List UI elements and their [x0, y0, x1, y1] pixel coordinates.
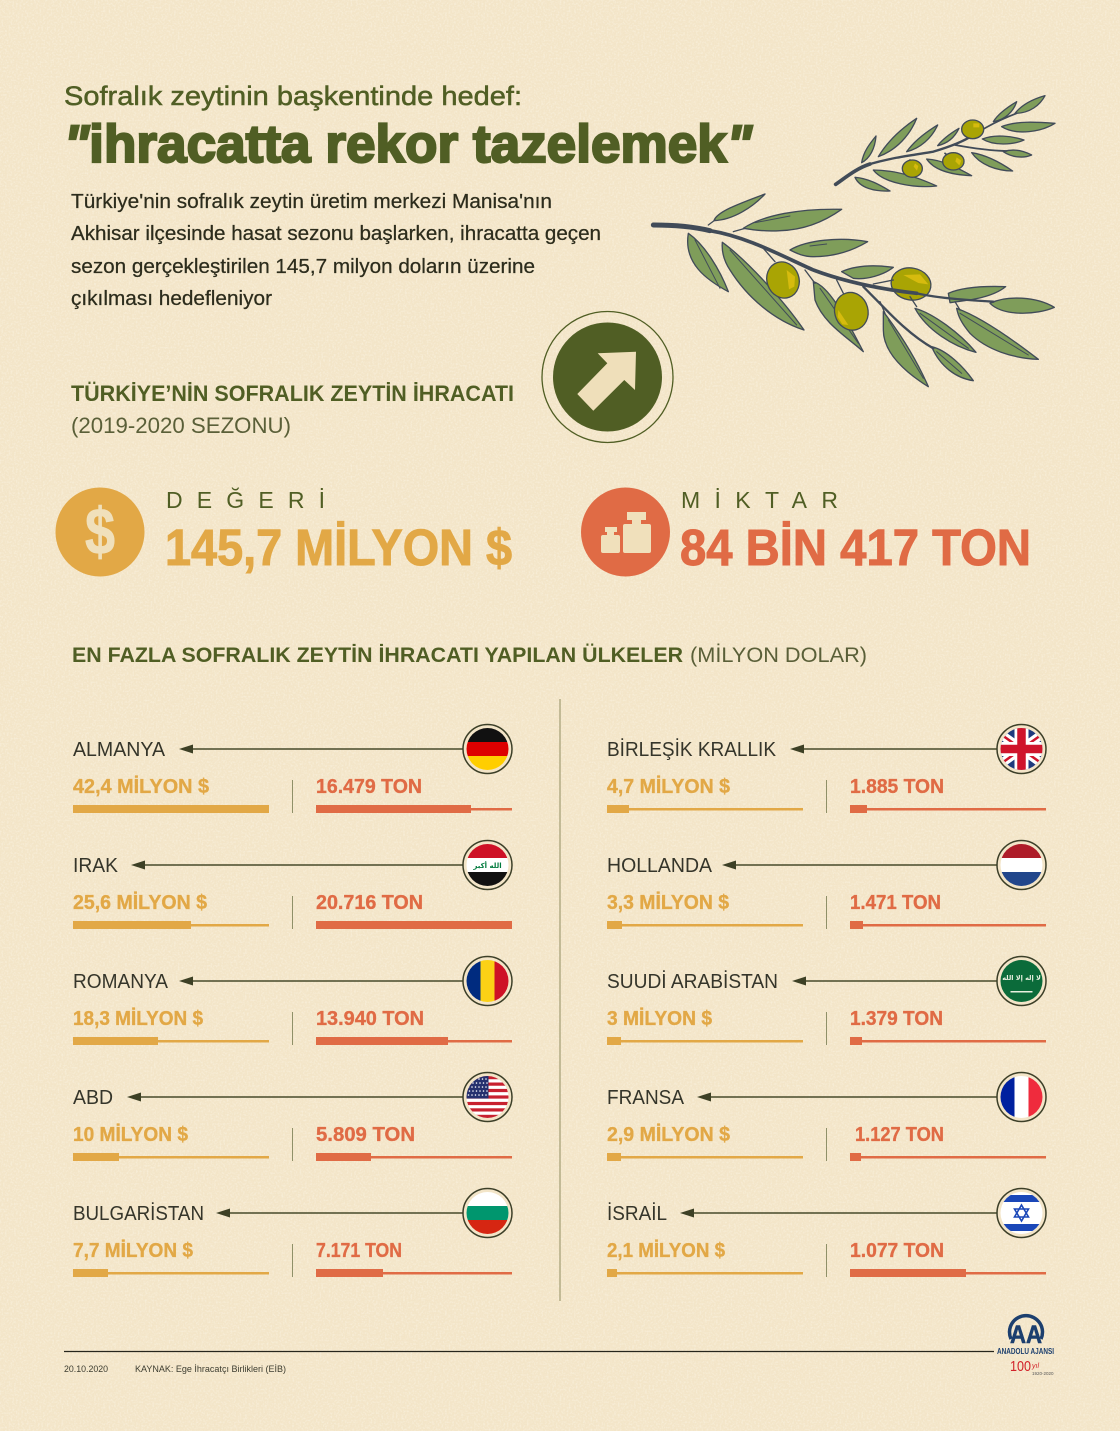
country row: Almanya — [73, 724, 512, 813]
title — [64, 81, 753, 174]
dollar value: 25,6 MİLYON $ — [73, 891, 207, 914]
intro text block: çıkılması hedefleniyor — [71, 287, 272, 310]
dollar value: 42,4 MİLYON $ — [73, 775, 209, 798]
tonnage bar — [316, 1037, 512, 1045]
value figure: 145,7 MİLYON $ — [165, 519, 512, 576]
country row: Fransa — [607, 1072, 1046, 1161]
arrow — [790, 744, 998, 754]
country row: Bulgaristan — [73, 1188, 512, 1277]
quantity label: MİKTAR — [681, 487, 838, 513]
dollar value: 3,3 MİLYON $ — [607, 891, 729, 914]
illustration: small olive branch — [836, 96, 1055, 191]
dollar bar — [73, 1269, 269, 1277]
icon: dollar coin — [56, 488, 144, 576]
tonnage value: 20.716 TON — [316, 892, 423, 914]
tonnage value: 5.809 TON — [316, 1124, 415, 1146]
dollar bar — [73, 921, 269, 929]
arrow — [792, 976, 998, 986]
footer: date and source: 20.10.2020 — [64, 1364, 108, 1374]
arrow — [179, 976, 464, 986]
icon: dollar coin: $ — [85, 494, 115, 568]
dollar bar — [607, 805, 803, 813]
country row: Romanya — [73, 956, 512, 1045]
country name: IRAK — [73, 855, 119, 877]
tonnage value: 13.940 TON — [316, 1008, 424, 1030]
dollar bar — [607, 1153, 803, 1161]
tonnage bar — [850, 1037, 1046, 1045]
country row: Birleşik Krallık — [607, 724, 1046, 813]
country name: BİRLEŞİK KRALLIK — [607, 738, 777, 761]
tonnage value: 7.171 TON — [316, 1240, 402, 1262]
dollar bar — [73, 805, 269, 813]
dollar value: 10 MİLYON $ — [73, 1123, 188, 1146]
tonnage bar — [316, 805, 512, 813]
heading: top export countries: EN FAZLA SOFRALIK ZEYTİN İHRACATI YAPILAN ÜLKELER — [72, 642, 683, 667]
dollar bar — [73, 1037, 269, 1045]
arrow — [131, 860, 464, 870]
dollar value: 7,7 MİLYON $ — [73, 1239, 193, 1262]
intro text block — [71, 190, 601, 310]
main heading: "ihracatta rekor tazelemek" — [64, 115, 753, 174]
arrow — [722, 860, 998, 870]
section heading: Turkish table olive exports: (2019-2020 SEZONU) — [71, 413, 291, 438]
tonnage bar — [850, 1153, 1046, 1161]
flag: Romania — [463, 956, 512, 1006]
dollar value: 3 MİLYON $ — [607, 1007, 712, 1030]
flag: USA — [463, 1072, 512, 1122]
flag: Iraq: الله أكبر — [472, 861, 502, 870]
dollar bar — [73, 1153, 269, 1161]
section heading: Turkish table olive exports — [71, 381, 514, 438]
tonnage value: 16.479 TON — [316, 776, 422, 798]
arrow — [127, 1092, 464, 1102]
dollar value: 4,7 MİLYON $ — [607, 775, 730, 798]
logo: Anadolu Ajansı: 1920-2020 — [1032, 1371, 1054, 1376]
dollar bar — [607, 1037, 803, 1045]
arrow — [680, 1208, 998, 1218]
icon: weights — [581, 488, 670, 576]
intro text block: Akhisar ilçesinde hasat sezonu başlarken, ihracatta geçen — [71, 222, 601, 245]
flag: Saudi Arabia — [997, 956, 1046, 1006]
country name: İSRAİL — [607, 1202, 667, 1225]
country row: Irak — [73, 840, 512, 929]
intro text block: Türkiye'nin sofralık zeytin üretim merkezi Manisa'nın — [71, 190, 552, 213]
value label: DEĞERİ — [166, 487, 325, 513]
tonnage bar — [316, 921, 512, 929]
tonnage value: 1.127 TON — [855, 1124, 944, 1146]
arrow — [179, 744, 464, 754]
arrow — [216, 1208, 464, 1218]
country name: SUUDİ ARABİSTAN — [607, 970, 778, 993]
stat: quantity — [581, 487, 1031, 576]
tonnage bar — [850, 921, 1046, 929]
subtitle: Sofralık zeytinin başkentinde hedef: — [64, 81, 522, 111]
illustration: large olive branch — [653, 194, 1054, 387]
logo: Anadolu Ajansı: 100 — [1010, 1358, 1031, 1375]
flag: France — [997, 1072, 1046, 1122]
logo: Anadolu Ajansı — [997, 1316, 1054, 1376]
flag: Netherlands — [997, 840, 1046, 890]
tonnage bar — [316, 1153, 512, 1161]
dollar value: 18,3 MİLYON $ — [73, 1007, 203, 1030]
footer: date and source: KAYNAK: Ege İhracatçı Birlikleri (EİB) — [135, 1364, 286, 1374]
section heading: Turkish table olive exports: TÜRKİYE’NİN SOFRALIK ZEYTİN İHRACATI — [71, 381, 514, 406]
tonnage value: 1.471 TON — [850, 892, 941, 914]
country row: ABD — [73, 1072, 512, 1161]
flag: Germany — [463, 724, 512, 774]
country name: BULGARİSTAN — [73, 1202, 204, 1225]
flag: Iraq — [463, 840, 512, 890]
footer: date and source — [64, 1364, 286, 1374]
country row: Suudi Arabistan — [607, 956, 1046, 1045]
tonnage value: 1.077 TON — [850, 1240, 944, 1262]
logo: Anadolu Ajansı: yıl — [1031, 1363, 1039, 1370]
country name: ALMANYA — [73, 739, 166, 761]
flag: UK — [997, 724, 1046, 774]
flag: Israel — [997, 1188, 1046, 1238]
tonnage value: 1.379 TON — [850, 1008, 943, 1030]
dollar bar — [607, 1269, 803, 1277]
logo: Anadolu Ajansı: AA — [1010, 1321, 1042, 1349]
tonnage value: 1.885 TON — [850, 776, 944, 798]
dollar bar — [607, 921, 803, 929]
heading: top export countries: (MİLYON DOLAR) — [690, 643, 867, 667]
country row: İsrail — [607, 1188, 1046, 1277]
country name: FRANSA — [607, 1087, 685, 1109]
flag: Bulgaria — [463, 1188, 512, 1238]
stat: value — [56, 487, 512, 576]
tonnage bar — [316, 1269, 512, 1277]
country name: ABD — [73, 1087, 113, 1109]
country row: Hollanda — [607, 840, 1046, 929]
country name: HOLLANDA — [607, 855, 713, 877]
logo: Anadolu Ajansı: ANADOLU AJANSI — [997, 1347, 1054, 1356]
country name: ROMANYA — [73, 971, 169, 993]
arrow badge — [542, 312, 673, 442]
quantity figure: 84 BİN 417 TON — [680, 519, 1031, 576]
tonnage bar — [850, 805, 1046, 813]
arrow — [697, 1092, 998, 1102]
flag: Saudi Arabia: لا إله إلا الله — [1002, 974, 1041, 982]
intro text block: sezon gerçekleştirilen 145,7 milyon doların üzerine — [71, 255, 535, 278]
dollar value: 2,1 MİLYON $ — [607, 1239, 725, 1262]
dollar value: 2,9 MİLYON $ — [607, 1123, 730, 1146]
tonnage bar — [850, 1269, 1046, 1277]
